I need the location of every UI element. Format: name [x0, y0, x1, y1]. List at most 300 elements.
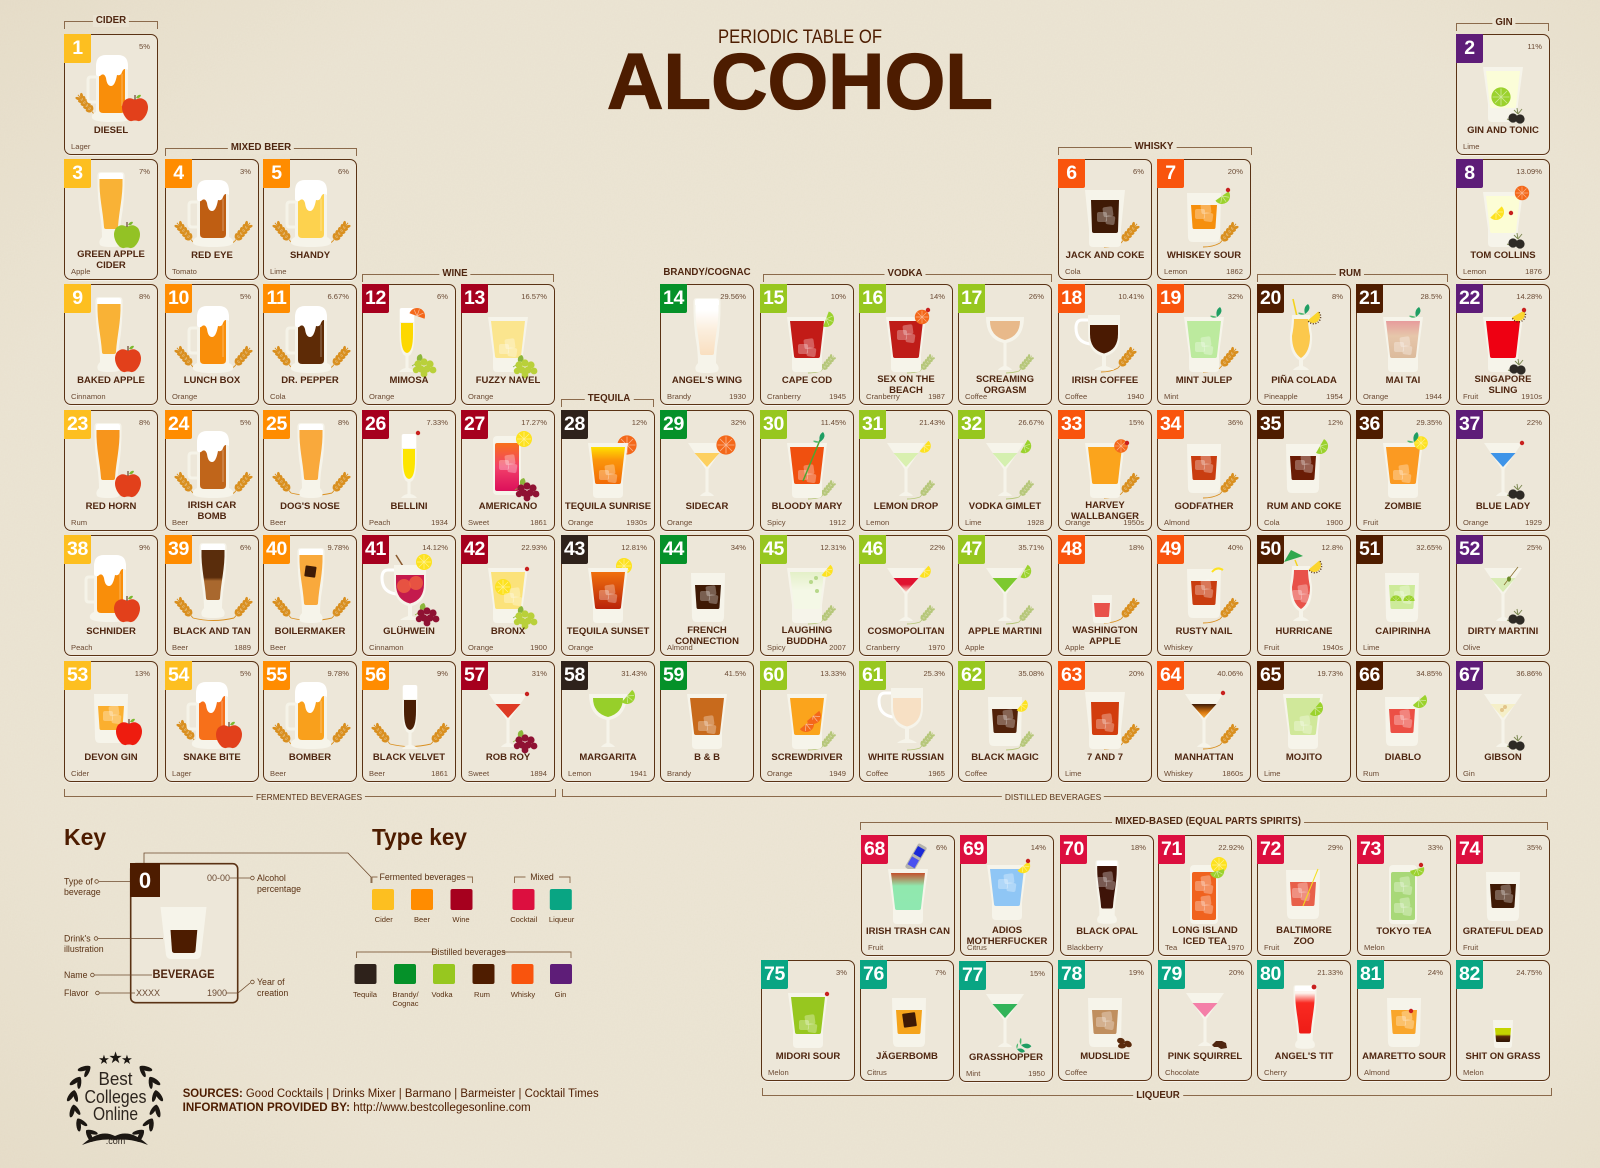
illustration: martini with lime: [986, 440, 1034, 500]
card 15: Cape Cod: Cranberry: [767, 392, 801, 400]
number tile: 27: [464, 413, 485, 435]
card 4: Red Eye: 3%: [240, 167, 251, 176]
illustration: small shot with wheat: [1058, 535, 1152, 656]
card 50: Hurricane: Fruit: [1264, 642, 1279, 652]
card 76: Jagerbomb: Citrus: [867, 1068, 887, 1076]
number tile: 63: [1061, 664, 1082, 686]
card 60: Screwdriver: 1949: [829, 768, 846, 778]
card 23: Red Horn: [64, 410, 158, 531]
card 80: Angel's Tit: Cherry: [1264, 1068, 1287, 1076]
card 67: Gibson: Gin: [1463, 768, 1475, 778]
number tile: 23: [67, 413, 88, 435]
card 27: Americano: 17.27%: [521, 418, 547, 427]
number tile: [1058, 410, 1085, 439]
card 43: Tequila Sunset: [561, 535, 655, 656]
card 63: 7 and 7: [1058, 661, 1152, 782]
group bracket: whisky: [1058, 147, 1252, 155]
card 62: Black Magic: [958, 661, 1052, 782]
card 52: Dirty Martini: Olive: [1463, 642, 1480, 652]
illustration: glass with citrus and juniper: [1483, 186, 1530, 249]
number tile: 40: [266, 538, 287, 560]
card 1: Diesel: 5%: [139, 42, 150, 51]
illustration: rocks glass with wheat: [1085, 190, 1140, 248]
card 49: Rusty Nail: [1157, 535, 1251, 656]
number tile: 36: [1359, 413, 1380, 435]
key callout labels: Alcohol: [257, 873, 286, 883]
logo stars: ★: [121, 1052, 133, 1067]
number tile: 33: [1061, 413, 1082, 435]
card 18: Irish Coffee: 1940: [1127, 392, 1144, 400]
card 26: Bellini: BELLINI: [391, 501, 427, 512]
card 74: Grateful Dead: Fruit: [1463, 942, 1478, 952]
card 71: Long Island Iced Tea: LONG ISLAND: [1172, 924, 1238, 936]
card 10: Lunch Box: 5%: [240, 292, 251, 301]
number tile: 61: [862, 664, 883, 686]
card 66: Diablo: Rum: [1363, 768, 1379, 778]
sample card: 0: [139, 868, 151, 893]
card 78: Mudslide: [1058, 960, 1152, 1081]
card 3: Green Apple Cider: [64, 159, 158, 280]
illustration: green drink with mint: [1184, 307, 1239, 372]
illustration: martini with olive and juniper: [1456, 535, 1550, 656]
logo stars: ★: [98, 1052, 110, 1067]
illustration: beer mug with apple: [75, 55, 148, 122]
card 13: Fuzzy Navel: [461, 284, 555, 405]
card 47: Apple Martini: [958, 535, 1052, 656]
card 17: Screaming Orgasm: ORGASM: [984, 385, 1026, 396]
swatch labels: Whisky: [511, 990, 535, 999]
number tile: [64, 535, 91, 564]
number tile: [760, 661, 787, 690]
number tile: 2: [1464, 37, 1475, 59]
card 26: Bellini: Peach: [369, 518, 391, 526]
illustration: glass with lime and juniper: [1483, 67, 1525, 124]
card 75: Midori Sour: 3%: [836, 968, 847, 977]
card 35: Rum and Coke: 12%: [1328, 418, 1343, 427]
card 23: Red Horn: Rum: [71, 518, 87, 526]
card 60: Screwdriver: 13.33%: [820, 669, 846, 678]
number tile: 43: [564, 538, 585, 560]
card 38: Schnider: 9%: [139, 543, 150, 552]
illustration: orange drink with wheat: [1085, 439, 1140, 498]
illustration: red pint with cherry: [1257, 960, 1351, 1081]
laurel wreath: [65, 1060, 165, 1145]
card 57: Rob Roy: 1894: [530, 768, 547, 778]
card 76: Jagerbomb: [860, 960, 954, 1081]
sources: INFORMATION PROVIDED BY: http://www.bestcollegesonline.com: [183, 1102, 531, 1114]
card 22: Singapore Sling: Fruit: [1463, 392, 1478, 400]
number tile: [760, 535, 787, 564]
card 37: Blue Lady: Orange: [1463, 518, 1488, 526]
card 35: Rum and Coke: Cola: [1264, 518, 1280, 526]
card 21: Mai Tai: 28.5%: [1420, 292, 1442, 301]
card 53: Devon Gin: Cider: [71, 768, 89, 778]
card 24: Irish Car Bomb: [165, 410, 259, 531]
number tile: 30: [763, 413, 784, 435]
card 78: Mudslide: Coffee: [1065, 1068, 1087, 1076]
card 7: Whiskey Sour: Lemon: [1164, 266, 1187, 276]
card 69: Adios Motherfucker: ADIOS: [992, 924, 1022, 936]
card 8: Tom Collins: 1876: [1525, 266, 1542, 276]
card 68: Irish Trash Can: [861, 835, 955, 956]
card 82: Shit on Grass: 24.75%: [1516, 968, 1542, 977]
card 66: Diablo: [1356, 661, 1450, 782]
card 48: Washington Apple: WASHINGTON: [1072, 624, 1138, 636]
card 46: Cosmopolitan: 22%: [930, 543, 945, 552]
card 3: Green Apple Cider: CIDER: [96, 260, 126, 271]
card 16: Sex on the Beach: Cranberry: [866, 392, 900, 400]
key callout labels: Type of: [64, 876, 93, 886]
number tile: [1058, 960, 1085, 989]
number tile: [959, 961, 986, 990]
card 77: Grasshopper: 15%: [1030, 969, 1045, 978]
card 37: Blue Lady: 22%: [1527, 418, 1542, 427]
number tile: 19: [1160, 287, 1181, 309]
card 48: Washington Apple: [1058, 535, 1152, 656]
card 53: Devon Gin: DEVON GIN: [84, 752, 138, 763]
card 73: Tokyo Tea: [1357, 835, 1451, 956]
card 55: Bomber: 9.78%: [327, 669, 349, 678]
card 52: Dirty Martini: 25%: [1527, 543, 1542, 552]
illustration: green martini with mint: [959, 961, 1053, 1082]
card 19: Mint Julep: [1157, 284, 1251, 405]
card 62: Black Magic: BLACK MAGIC: [971, 752, 1039, 763]
number tile: 10: [168, 287, 189, 309]
card 68: Irish Trash Can: IRISH TRASH CAN: [866, 926, 950, 937]
group bracket: vodka: [763, 274, 1052, 282]
card 77: Grasshopper: [959, 961, 1053, 1082]
illustration: rocks glass with apple: [64, 661, 158, 782]
card 1: Diesel: Lager: [71, 142, 90, 150]
illustration: flute with wheat: [362, 661, 456, 782]
card 20: Pina Colada: 1954: [1326, 392, 1343, 400]
number tile: [1257, 835, 1284, 864]
card 2: Gin and Tonic: 11%: [1527, 42, 1542, 51]
card 71: Long Island Iced Tea: Tea: [1165, 942, 1177, 952]
illustration: martini with onions and juniper: [1456, 661, 1550, 782]
number tile: 41: [365, 538, 386, 560]
card 45: Laughing Buddha: 2007: [829, 642, 846, 652]
text: WINE: [442, 268, 468, 279]
card 5: Shandy: 6%: [338, 167, 349, 176]
card 25: Dog's Nose: [263, 410, 357, 531]
card 22: Singapore Sling: SINGAPORE: [1474, 374, 1532, 384]
card 47: Apple Martini: 35.71%: [1018, 543, 1044, 552]
number tile: 37: [1459, 413, 1480, 435]
number tile: 75: [764, 963, 785, 985]
card 17: Screaming Orgasm: SCREAMING: [976, 374, 1034, 384]
card 41: Gluhwein: GLÜHWEIN: [383, 626, 435, 637]
card 54: Snake Bite: [165, 661, 259, 782]
card 15: Cape Cod: CAPE COD: [782, 375, 832, 386]
number tile: 59: [663, 664, 684, 686]
number tile: 45: [763, 538, 784, 560]
card 36: Zombie: ZOMBIE: [1385, 501, 1421, 512]
swatch labels: Cider: [375, 915, 393, 924]
card 6: Jack and Coke: [1058, 159, 1152, 280]
card 13: Fuzzy Navel: 16.57%: [521, 292, 547, 301]
card 35: Rum and Coke: [1257, 410, 1351, 531]
number tile: [1157, 410, 1184, 439]
card 11: Dr. Pepper: Cola: [270, 392, 286, 400]
card 31: Lemon Drop: [859, 410, 953, 531]
number tile: 77: [962, 964, 983, 986]
card 31: Lemon Drop: LEMON DROP: [874, 501, 938, 512]
number tile: 68: [864, 838, 885, 860]
illustration: hurricane glass with umbrella: [1257, 535, 1351, 656]
illustration: tall glass with lemon and grapes: [493, 431, 540, 502]
number tile: [958, 535, 985, 564]
number tile: 29: [663, 413, 684, 435]
number tile: [263, 159, 290, 188]
card 13: Fuzzy Navel: FUZZY NAVEL: [476, 375, 540, 386]
card 8: Tom Collins: Lemon: [1463, 266, 1486, 276]
card 72: Baltimore Zoo: Fruit: [1264, 942, 1279, 952]
illustration: irish coffee glass: [1074, 315, 1137, 372]
key callout labels: Drink's: [64, 934, 91, 944]
group bracket: liqueur: LIQUEUR: [1136, 1090, 1180, 1101]
card 61: White Russian: WHITE RUSSIAN: [868, 752, 944, 763]
number tile: [1456, 661, 1483, 690]
card 81: Amaretto Sour: AMARETTO SOUR: [1362, 1051, 1446, 1062]
number tile: 52: [1459, 538, 1480, 560]
card 64: Manhattan: 1860s: [1222, 768, 1243, 778]
number tile: [1356, 661, 1383, 690]
card 44: French Connection: CONNECTION: [675, 636, 739, 647]
card 31: Lemon Drop: 21.43%: [919, 418, 945, 427]
card 21: Mai Tai: Orange: [1363, 392, 1388, 400]
card 21: Mai Tai: 1944: [1425, 392, 1442, 400]
swatch labels: Rum: [474, 990, 490, 999]
card 20: Pina Colada: [1257, 284, 1351, 405]
card 49: Rusty Nail: 40%: [1228, 543, 1243, 552]
number tile: [461, 661, 488, 690]
group bracket: fermented beverages: [64, 789, 556, 797]
text: TEQUILA: [588, 393, 630, 404]
card 8: Tom Collins: 13.09%: [1516, 167, 1542, 176]
number tile: [461, 410, 488, 439]
number tile: 25: [266, 413, 287, 435]
illustration: coupe with lime: [561, 661, 655, 782]
illustration: pint with wheat: [272, 423, 351, 498]
card 36: Zombie: 29.35%: [1416, 418, 1442, 427]
card 67: Gibson: GIBSON: [1484, 752, 1522, 763]
number tile: [1357, 835, 1384, 864]
card 71: Long Island Iced Tea: 22.92%: [1218, 843, 1244, 852]
illustration: creamy drink in mug glass: [859, 661, 953, 782]
card 58: Margarita: MARGARITA: [579, 752, 637, 763]
card 32: Vodka Gimlet: 26.67%: [1018, 418, 1044, 427]
card 58: Margarita: Lemon: [568, 768, 591, 778]
card 25: Dog's Nose: 8%: [338, 418, 349, 427]
illustration: beer mug with wheat: [174, 306, 253, 373]
card 12: Mimosa: [362, 284, 456, 405]
card 30: Bloody Mary: BLOODY MARY: [772, 501, 842, 512]
number tile: 50: [1260, 538, 1281, 560]
number tile: 56: [365, 664, 386, 686]
number tile: 28: [564, 413, 585, 435]
number tile: 12: [365, 287, 386, 309]
card 14: Angel's Wing: Brandy: [667, 392, 691, 400]
card 7: Whiskey Sour: WHISKEY SOUR: [1167, 250, 1241, 261]
heading: key: Key: [64, 824, 106, 850]
card 45: Laughing Buddha: LAUGHING: [782, 624, 832, 636]
number tile: 47: [961, 538, 982, 560]
number tile: [958, 410, 985, 439]
card 37: Blue Lady: 1929: [1525, 518, 1542, 526]
card 58: Margarita: 1941: [630, 768, 647, 778]
card 16: Sex on the Beach: BEACH: [889, 385, 923, 396]
card 64: Manhattan: Whiskey: [1164, 768, 1193, 778]
card 27: Americano: Sweet: [468, 518, 489, 526]
number tile: 13: [464, 287, 485, 309]
card 3: Green Apple Cider: GREEN APPLE: [77, 248, 145, 260]
illustration: tall glass with citrus: [1158, 835, 1252, 956]
card 33: Harvey Wallbanger: 15%: [1129, 418, 1144, 427]
number tile: [660, 410, 687, 439]
card 25: Dog's Nose: Beer: [270, 518, 286, 526]
card 46: Cosmopolitan: COSMOPOLITAN: [868, 626, 944, 637]
text: MIXED-BASED (EQUAL PARTS SPIRITS): [1115, 816, 1301, 827]
card 24: Irish Car Bomb: BOMB: [197, 511, 227, 522]
card 70: Black Opal: [1060, 835, 1154, 956]
number tile: 11: [266, 287, 286, 309]
number tile: [1257, 960, 1284, 989]
number tile: 60: [763, 664, 784, 686]
illustration: green martini: [958, 535, 1052, 656]
number tile: [660, 661, 687, 690]
card 27: Americano: [461, 410, 555, 531]
illustration: two-tone pint with wheat: [165, 535, 259, 656]
group bracket: cider: [64, 21, 158, 29]
card 39: Black and Tan: BLACK AND TAN: [173, 626, 251, 637]
card 7: Whiskey Sour: 1862: [1226, 266, 1243, 276]
illustration: beer mug with wheat: [174, 180, 253, 247]
card 30: Bloody Mary: 1912: [829, 518, 846, 526]
card 6: Jack and Coke: JACK AND COKE: [1066, 250, 1144, 261]
card 18: Irish Coffee: [1058, 284, 1152, 405]
card 46: Cosmopolitan: [859, 535, 953, 656]
card 22: Singapore Sling: 14.28%: [1516, 292, 1542, 301]
card 65: Mojito: 19.73%: [1317, 669, 1343, 678]
number tile: 64: [1160, 664, 1181, 686]
card 8: Tom Collins: TOM COLLINS: [1470, 250, 1536, 261]
number tile: 6: [1066, 162, 1077, 184]
card 23: Red Horn: RED HORN: [86, 501, 136, 512]
card 20: Pina Colada: 8%: [1332, 292, 1343, 301]
number tile: 53: [67, 664, 88, 686]
number tile: [1456, 284, 1483, 313]
swatch labels: Vodka: [431, 990, 453, 999]
illustration: red rocks glass with lime: [1356, 661, 1450, 782]
number tile: [362, 661, 389, 690]
group bracket: distilled beverages: [562, 789, 1547, 797]
number tile: [1060, 835, 1087, 864]
card 28: Tequila Sunrise: [561, 410, 655, 531]
card 56: Black Velvet: BLACK VELVET: [373, 752, 445, 763]
swatch labels: Cognac: [392, 999, 419, 1008]
card 71: Long Island Iced Tea: [1158, 835, 1252, 956]
logo stars: [98, 1050, 133, 1067]
number tile: [263, 535, 290, 564]
group bracket: distilled beverages: DISTILLED BEVERAGES: [1005, 792, 1101, 802]
card 51: Caipirinha: 32.65%: [1416, 543, 1442, 552]
card 1: Diesel: DIESEL: [94, 125, 128, 136]
card 64: Manhattan: MANHATTAN: [1174, 752, 1234, 763]
card 80: Angel's Tit: 21.33%: [1317, 968, 1343, 977]
card 34: Godfather: Almond: [1164, 518, 1190, 526]
card 77: Grasshopper: GRASSHOPPER: [969, 1052, 1043, 1063]
card 14: Angel's Wing: 1930: [729, 392, 746, 400]
card 51: Caipirinha: [1356, 535, 1450, 656]
number tile: 46: [862, 538, 883, 560]
logo stars: ★: [108, 1050, 123, 1067]
card 63: 7 and 7: Lime: [1065, 768, 1081, 778]
card 41: Gluhwein: 14.12%: [422, 543, 448, 552]
card 23: Red Horn: 8%: [139, 418, 150, 427]
card 4: Red Eye: RED EYE: [191, 250, 233, 261]
card 43: Tequila Sunset: TEQUILA SUNSET: [567, 626, 649, 637]
card 62: Black Magic: Coffee: [965, 768, 987, 778]
text: BRANDY/COGNAC: [663, 267, 751, 278]
card 45: Laughing Buddha: BUDDHA: [786, 636, 828, 647]
number tile: [859, 410, 886, 439]
card 19: Mint Julep: Mint: [1164, 392, 1178, 400]
card 40: Boilermaker: Beer: [270, 642, 286, 652]
key callout labels: illustration: [64, 944, 104, 954]
text: WHISKY: [1135, 141, 1173, 152]
number tile: [859, 661, 886, 690]
card 60: Screwdriver: Orange: [767, 768, 792, 778]
number tile: [561, 535, 588, 564]
number tile: 17: [961, 287, 982, 309]
illustration: martini with lemon: [887, 440, 935, 500]
number tile: 18: [1061, 287, 1082, 309]
card 79: Pink Squirrel: 20%: [1229, 968, 1244, 977]
card 14: Angel's Wing: ANGEL'S WING: [672, 375, 742, 386]
card 70: Black Opal: BLACK OPAL: [1076, 926, 1138, 937]
text: MIXED BEER: [231, 142, 291, 153]
card 61: White Russian: [859, 661, 953, 782]
number tile: 39: [168, 538, 189, 560]
card 50: Hurricane: 1940s: [1322, 642, 1343, 652]
illustration: red rocks glass with straw: [1257, 835, 1351, 956]
card 44: French Connection: FRENCH: [687, 624, 727, 636]
card 2: Gin and Tonic: Lime: [1463, 142, 1479, 150]
card 62: Black Magic: 35.08%: [1018, 669, 1044, 678]
card 30: Bloody Mary: Spicy: [767, 518, 786, 526]
card 72: Baltimore Zoo: [1257, 835, 1351, 956]
card 30: Bloody Mary: 11.45%: [821, 418, 846, 427]
number tile: 67: [1459, 664, 1480, 686]
illustration: flute with cherry: [401, 430, 420, 498]
illustration: rocks glass with lime: [1286, 439, 1328, 493]
card 17: Screaming Orgasm: [958, 284, 1052, 405]
number tile: [165, 284, 192, 313]
number tile: [761, 960, 788, 989]
text: VODKA: [888, 268, 922, 279]
card 45: Laughing Buddha: [760, 535, 854, 656]
number tile: 65: [1260, 664, 1281, 686]
card 69: Adios Motherfucker: Citrus: [967, 942, 987, 952]
illustration: tall green glass: [1357, 835, 1451, 956]
card 5: Shandy: SHANDY: [290, 250, 330, 261]
card 5: Shandy: Lime: [270, 266, 286, 276]
key callout labels: [64, 873, 301, 998]
key callout labels: Name: [64, 970, 88, 980]
number tile: [1456, 410, 1483, 439]
card 52: Dirty Martini: DIRTY MARTINI: [1468, 626, 1538, 637]
